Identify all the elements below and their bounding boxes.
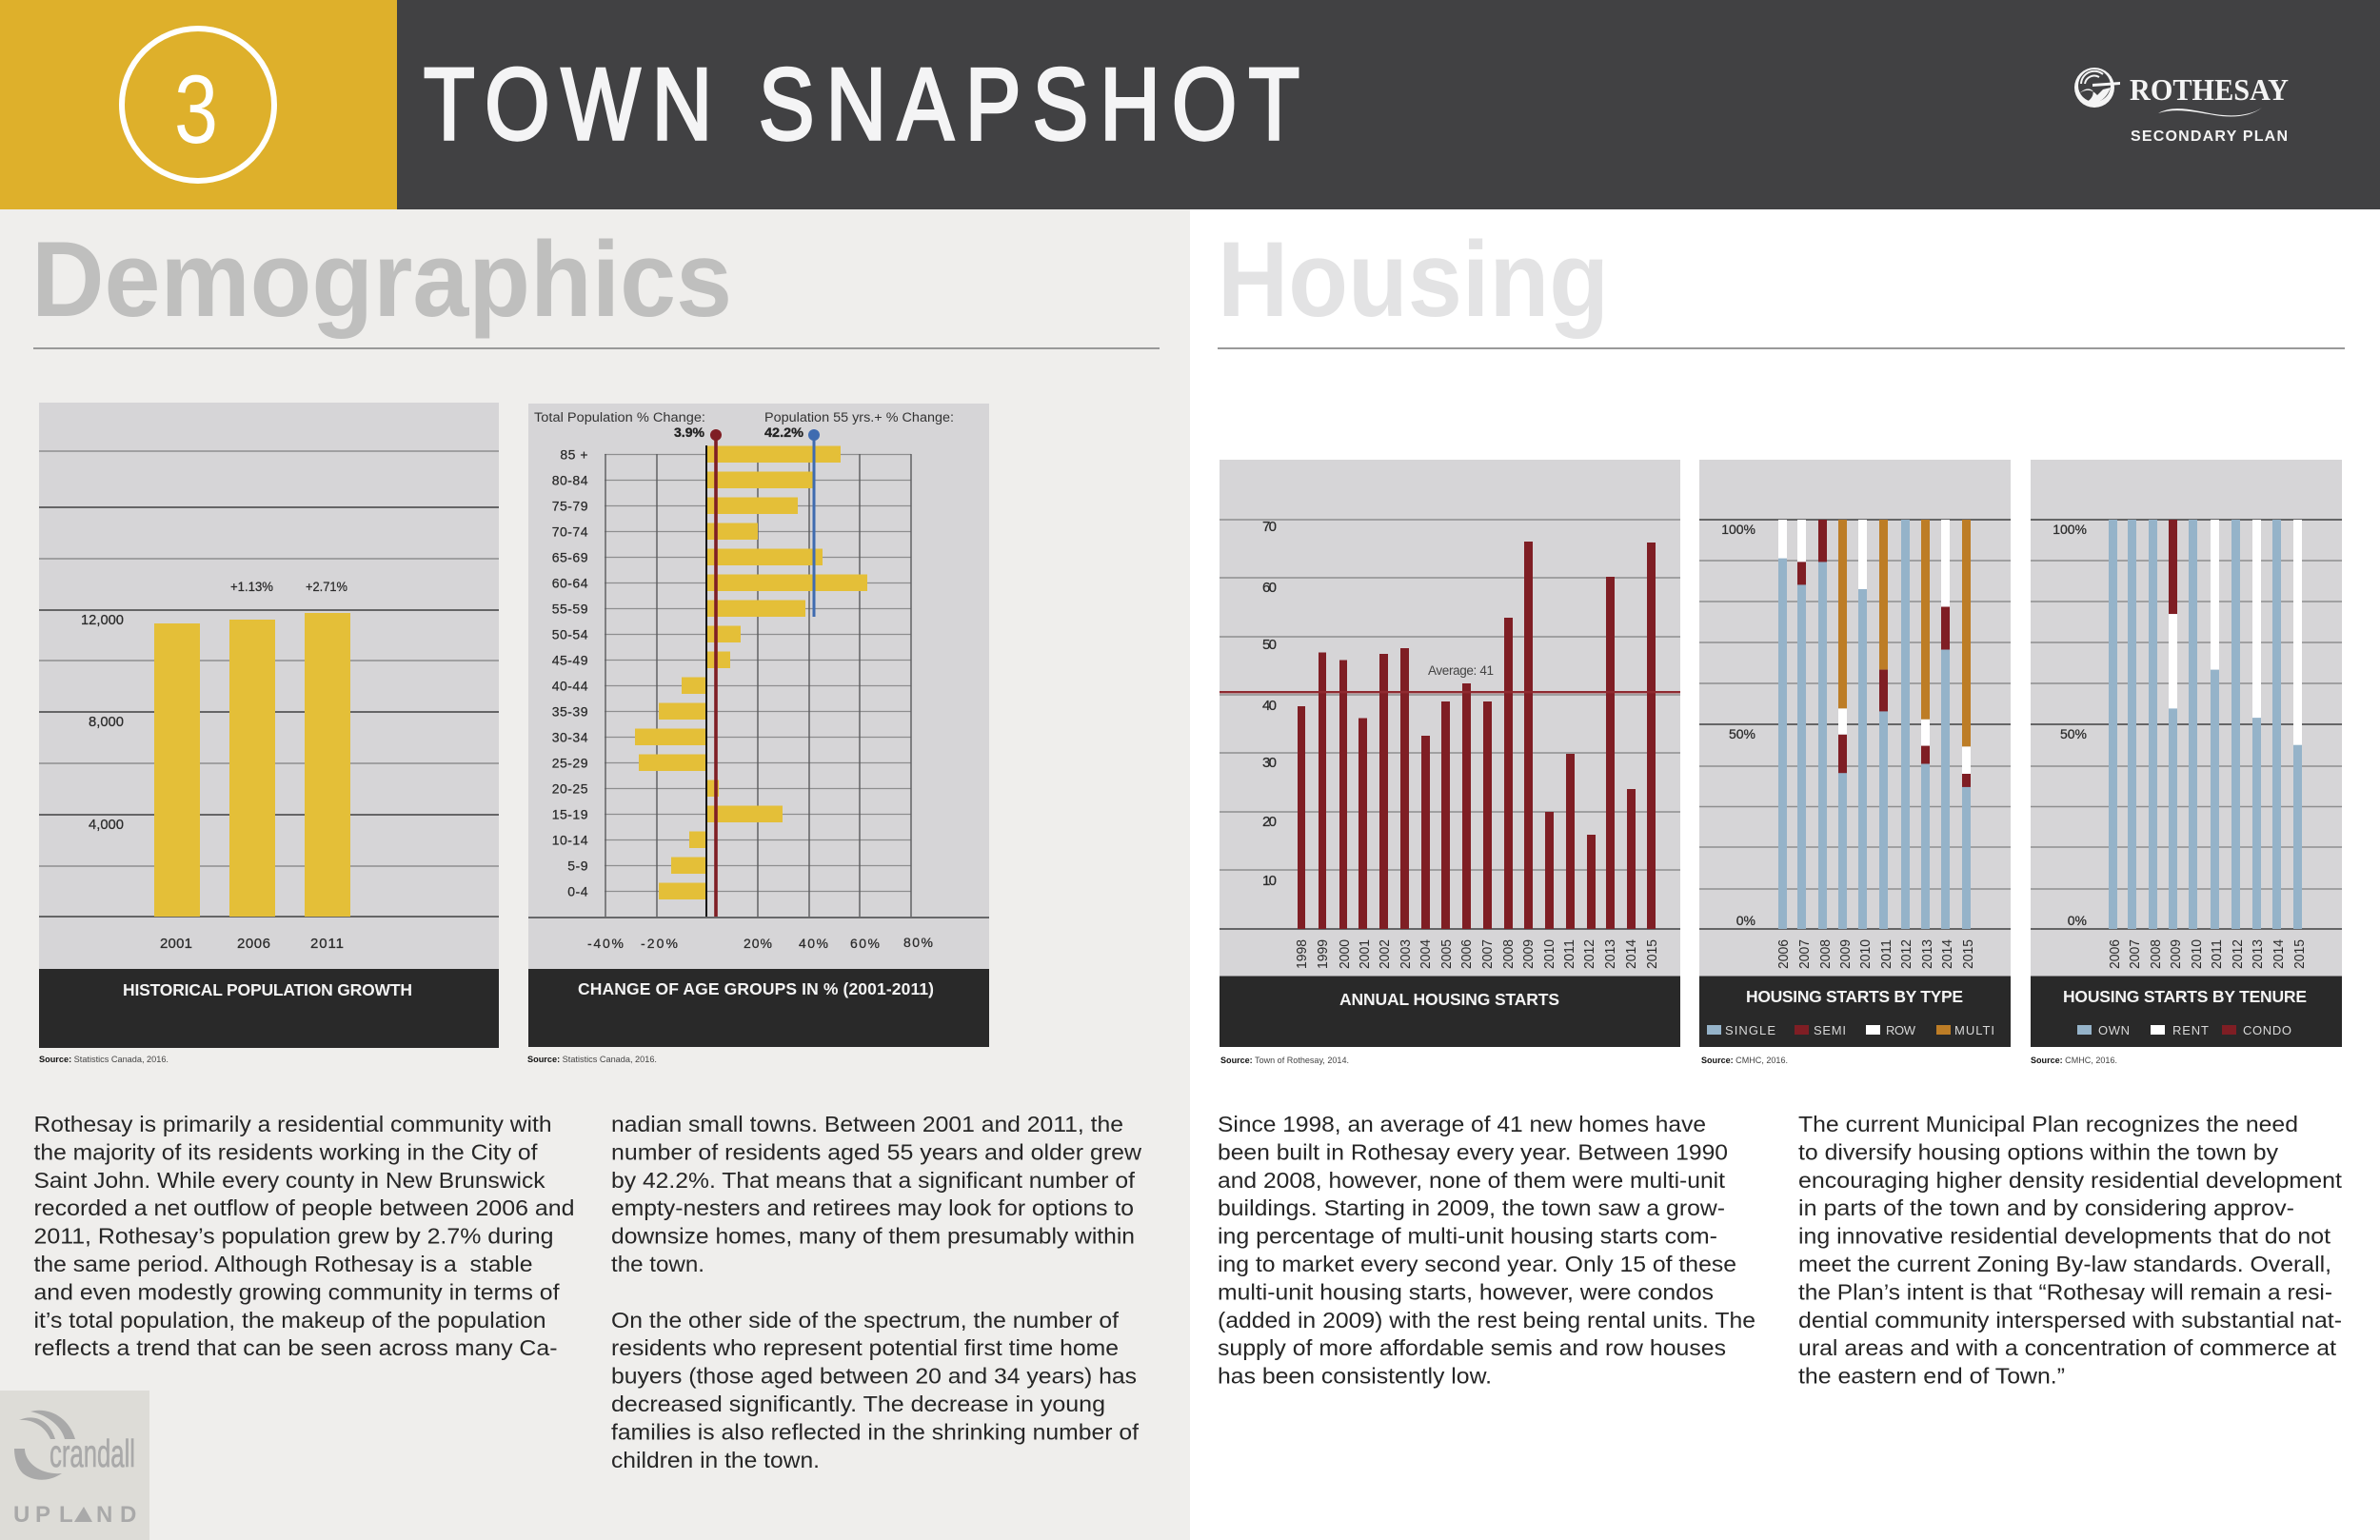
text block: demographics column 2: nadian small towns. Between 2001 and 2011, the [611,1112,1123,1136]
age labels: 50-54 [552,626,588,642]
y axis labels: 50 [1262,637,1277,653]
year labels: 2015 [2291,939,2308,969]
logo: Rothesay Secondary Plan: ROTHESAY [2130,72,2289,107]
source: Source: CMHC, 2016. [1701,1056,1788,1066]
year labels: 2008 [2148,939,2164,969]
year labels: 2014 [2271,939,2287,969]
text block: demographics column 1: recorded a net outflow of people between 2006 and [34,1195,575,1220]
caption bar: CHANGE OF AGE GROUPS IN % (2001-2011) [578,979,934,998]
text block: housing column 2: the eastern end of Town.” [1798,1364,2065,1389]
caption bar: ANNUAL HOUSING STARTS [1339,990,1559,1009]
text block: housing column 1: (added in 2009) with the rest being rental units. The [1218,1308,1755,1333]
source: Source: Statistics Canada, 2016. [39,1055,169,1065]
caption bar [39,969,499,1048]
year labels: 1999 [1315,939,1331,969]
text block: housing column 2: encouraging higher density residential development [1798,1168,2343,1193]
upland wordmark: UPLAND [13,1502,136,1528]
age labels: 60-64 [552,575,588,590]
text block: demographics column 2: empty-nesters and retirees may look for options to [611,1195,1134,1220]
text block: housing column 2: dential community interspersed with substantial nat- [1798,1308,2342,1333]
text block: demographics column 1: it’s total population, the makeup of the population [34,1308,546,1333]
annual bars [1298,542,1656,929]
year labels: 2007 [2127,939,2143,969]
year labels [1775,939,1976,969]
year labels: 2014 [1623,939,1639,969]
age labels: 80-84 [552,472,588,487]
y axis labels: 60 [1262,580,1277,596]
caption bar with legend [1699,977,2011,1047]
y axis labels: 0% [2068,913,2087,928]
year labels: 2009 [2168,939,2184,969]
text block: housing column 2: the Plan’s intent is that “Rothesay will remain a resi- [1798,1279,2332,1304]
marker labels: 3.9% [674,425,704,440]
year labels: 2009 [1837,939,1854,969]
caption bar with legend: HOUSING STARTS BY TYPE [1746,987,1963,1006]
year labels [1294,939,1660,969]
text block: demographics column 1: Saint John. While every county in New Brunswick [34,1168,545,1193]
x axis labels: 2001 [160,936,192,952]
y axis labels: 100% [2053,522,2087,537]
year labels [2107,939,2308,969]
y axis labels: 10 [1262,873,1277,889]
caption bar with legend [2031,977,2342,1047]
text block: demographics column 2: On the other side of the spectrum, the number of [611,1308,1120,1333]
y axis labels: 4,000 [89,817,124,833]
source: Source: CMHC, 2016. [2031,1056,2117,1066]
y axis labels: 20 [1262,814,1277,830]
stacked bars [2109,520,2302,929]
year labels: 1998 [1294,939,1310,969]
year labels: 2013 [1602,939,1618,969]
caption bar with legend: OWN [2098,1023,2130,1037]
age labels: 10-14 [552,832,588,847]
year labels: 2005 [1438,939,1455,969]
caption bar with legend: CONDO [2243,1023,2291,1037]
text block: demographics column 2: families is also reflected in the shrinking number of [611,1419,1140,1444]
caption bar with legend: SINGLE [1725,1023,1775,1037]
x axis labels: -20% [641,936,678,951]
heading: Demographics: Demographics [31,220,732,339]
text block: housing column 2: The current Municipal Plan recognizes the need [1798,1112,2298,1136]
text block: demographics column 1: the same period. Although Rothesay is a stable [34,1252,533,1276]
age labels: 0-4 [567,883,588,898]
year labels: 2010 [1541,939,1557,969]
year labels: 2007 [1479,939,1496,969]
marker: population 55+ change [808,429,820,617]
text block: demographics column 1: the majority of its residents working in the City of [34,1139,538,1164]
logo: Rothesay Secondary Plan: SECONDARY PLAN [2131,128,2288,145]
average line: Average: 41 [1428,663,1494,678]
growth labels: +1.13% [230,579,273,594]
source: Source: Town of Rothesay, 2014. [1220,1056,1349,1066]
text block: housing column 1: supply of more affordable semis and row houses [1218,1335,1726,1360]
year labels: 2008 [1817,939,1834,969]
caption bar with legend: SEMI [1814,1023,1846,1037]
year labels: 2007 [1796,939,1813,969]
y axis labels: 50% [2060,726,2087,741]
y axis labels [1262,519,1277,889]
y axis labels: 70 [1262,519,1277,535]
text block: housing column 1: multi-unit housing starts, however, were condos [1218,1279,1714,1304]
panel: change of age groups [528,404,989,1047]
stacked bars [1778,520,1971,929]
y axis labels: 40 [1262,698,1277,714]
caption bar: HISTORICAL POPULATION GROWTH [123,980,412,999]
population bars [154,613,350,917]
marker labels [534,410,954,440]
section number badge: 3 [174,55,218,164]
x axis labels: 2011 [310,936,344,952]
text block: housing column 2 [1798,1112,2343,1389]
year labels: 2013 [1919,939,1935,969]
text block: housing column 2: meet the current Zoning By-law standards. Overall, [1798,1252,2331,1276]
text block: housing column 2: ing innovative residential developments that do not [1798,1224,2331,1249]
marker labels: Population 55 yrs.+ % Change: [764,410,954,424]
text block: housing column 1: buildings. Starting in 2009, the town saw a grow- [1218,1195,1725,1220]
marker: total population change [710,429,722,917]
age labels: 75-79 [552,499,588,514]
age labels: 25-29 [552,756,588,771]
header band [0,0,2380,209]
year labels: 2010 [1857,939,1874,969]
text block: housing column 2: to diversify housing options within the town by [1798,1139,2279,1164]
year labels: 2012 [1898,939,1914,969]
section number badge [122,29,274,181]
caption bar [528,969,989,1047]
age labels: 15-19 [552,807,588,822]
age labels: 5-9 [567,859,588,874]
age labels: 40-44 [552,678,588,693]
caption bar with legend: MULTI [1954,1023,1994,1037]
text block: demographics column 2: downsize homes, many of them presumably within [611,1224,1135,1249]
text block: demographics column 2: buyers (those aged between 20 and 34 years) has [611,1364,1137,1389]
x axis labels: 20% [744,936,772,951]
x axis labels: -40% [587,936,624,951]
year labels: 2002 [1377,939,1393,969]
x axis labels: 80% [903,935,933,950]
source: Source: Statistics Canada, 2016. [527,1055,657,1065]
year labels: 2012 [2230,939,2246,969]
text block: demographics column 2: by 42.2%. That means that a significant number of [611,1168,1136,1193]
logo block: Crandall Upland: crandall [50,1431,135,1475]
text block: demographics column 2: children in the town. [611,1448,820,1472]
gridlines [605,454,911,917]
text block: demographics column 2 [611,1112,1141,1472]
year labels: 2012 [1581,939,1597,969]
panel: housing starts by tenure [2031,460,2342,1047]
panel: housing starts by type [1699,460,2011,1047]
panel: annual housing starts [1220,460,1680,1047]
year labels: 2004 [1418,939,1434,969]
y axis labels [1721,522,1755,928]
text block: demographics column 2: decreased significantly. The decrease in young [611,1392,1105,1416]
y axis labels: 8,000 [89,714,124,730]
text block: demographics column 1: 2011, Rothesay’s population grew by 2.7% during [34,1224,554,1249]
age labels [552,447,588,898]
logo block: Crandall Upland [0,1391,149,1540]
y axis labels [2053,522,2087,928]
age labels: 30-34 [552,729,588,744]
y axis labels: 50% [1729,726,1755,741]
marker labels: 42.2% [764,425,803,440]
text block: demographics column 2: the town. [611,1252,704,1276]
logo: Rothesay Secondary Plan [2074,68,2289,145]
year labels: 2011 [1561,939,1577,969]
text block: housing column 1: ing to market every second year. Only 15 of these [1218,1252,1736,1276]
text block: housing column 1: ing percentage of multi-unit housing starts com- [1218,1224,1717,1249]
text block: housing column 1: and 2008, however, none of them were multi-unit [1218,1168,1726,1193]
age labels: 65-69 [552,550,588,565]
text block: demographics column 1: and even modestly growing community in terms of [34,1279,560,1304]
year labels: 2006 [1775,939,1792,969]
text block: demographics column 2: residents who represent potential first time home [611,1335,1119,1360]
growth labels: +2.71% [306,579,347,594]
year labels: 2010 [2189,939,2205,969]
year labels: 2015 [1644,939,1660,969]
heading: Housing: Housing [1218,220,1609,339]
y axis labels [81,612,124,833]
text block: housing column 2: in parts of the town and by considering approv- [1798,1195,2294,1220]
title: TOWN SNAPSHOT [424,47,1299,161]
caption bar with legend: HOUSING STARTS BY TENURE [2063,987,2307,1006]
year labels: 2006 [2107,939,2123,969]
text block: demographics column 1: Rothesay is primarily a residential community with [34,1112,552,1136]
text block: housing column 1: has been consistently low. [1218,1364,1492,1389]
age labels: 55-59 [552,602,588,617]
age bars [635,445,867,899]
text block: housing column 1 [1218,1112,1755,1389]
y axis labels: 0% [1736,913,1755,928]
year labels: 2011 [1878,939,1894,969]
age labels: 85 + [560,447,588,463]
text block: demographics column 2: number of residents aged 55 years and older grew [611,1139,1141,1164]
caption bar [1220,977,1680,1047]
year labels: 2015 [1960,939,1976,969]
age labels: 70-74 [552,523,588,539]
year labels: 2008 [1500,939,1517,969]
year labels: 2006 [1458,939,1475,969]
year labels: 2003 [1398,939,1414,969]
x axis labels: 60% [850,936,880,951]
y axis labels: 100% [1721,522,1755,537]
growth labels [230,579,347,594]
text block: housing column 1: Since 1998, an average of 41 new homes have [1218,1112,1706,1136]
icon: crandall swoosh [14,1411,75,1480]
panel: historical population growth [39,403,499,1048]
marker labels: Total Population % Change: [534,410,705,424]
age labels: 45-49 [552,653,588,668]
text block: demographics column 1: reflects a trend that can be seen across many Ca- [34,1335,558,1360]
year labels: 2011 [2209,939,2225,969]
year labels: 2000 [1337,939,1353,969]
year labels: 2009 [1520,939,1537,969]
year labels: 2014 [1939,939,1955,969]
year labels: 2013 [2250,939,2266,969]
x axis labels [587,935,933,951]
text block: housing column 2: ural areas and with a concentration of commerce at [1798,1335,2337,1360]
age labels: 20-25 [552,780,588,796]
x axis labels [160,936,344,952]
x axis labels: 2006 [237,936,270,952]
year labels: 2001 [1357,939,1373,969]
caption bar with legend: RENT [2172,1023,2209,1037]
age labels: 35-39 [552,704,588,720]
text block: demographics column 1 [34,1112,575,1360]
y axis labels: 12,000 [81,612,124,628]
x axis labels: 40% [799,936,828,951]
y axis labels: 30 [1262,755,1277,771]
text block: housing column 1: been built in Rothesay every year. Between 1990 [1218,1139,1728,1164]
caption bar with legend: ROW [1886,1023,1916,1037]
